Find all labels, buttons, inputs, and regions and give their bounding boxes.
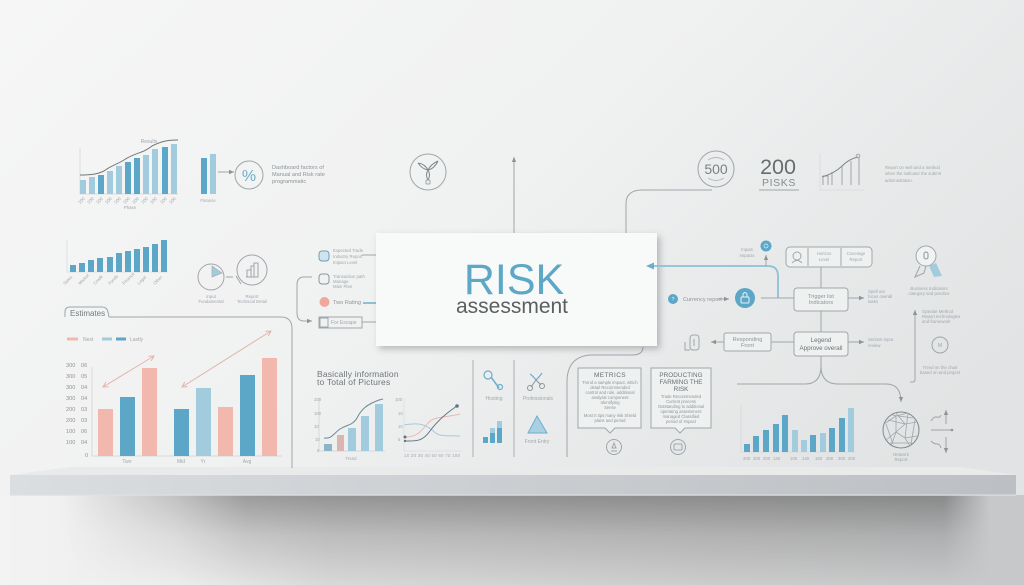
text block: right note [922, 309, 960, 324]
text block: medal caption [908, 286, 950, 296]
icon: directional arrows [931, 410, 953, 453]
chart: two bars with percent icon: Finance [200, 198, 216, 203]
arrow: up from card [513, 157, 515, 233]
icon: stacked bars [483, 421, 502, 443]
icon: key link: Hosting [486, 396, 503, 402]
icon: pie chart: Input [206, 294, 217, 299]
item 3: Two Rating [333, 300, 361, 306]
y axis labels: 06 [81, 363, 87, 369]
chart: top-left bars with trend line [77, 139, 178, 210]
chart: bottom-right bars: 160 [815, 456, 823, 461]
card: policy: plans and period [595, 418, 626, 423]
box: middle: Indicators [809, 300, 833, 306]
chart: second rising bars: Credit [92, 273, 104, 286]
y axis labels [66, 363, 88, 459]
heading: chart group: to Total of Pictures [317, 377, 390, 387]
side labels [868, 289, 894, 348]
stat: 200 risks: PISKS [762, 177, 796, 189]
card: predicting: Current process [666, 399, 696, 404]
text block: circle caption [920, 365, 961, 375]
card: predicting: Outstanding to additional [658, 404, 704, 409]
y axis labels: 05 [81, 374, 87, 380]
side labels: focus overall [868, 294, 892, 299]
arrow: blue into card [363, 302, 386, 304]
legend: Lastly [130, 337, 144, 343]
chart: second rising bars: Finance [121, 271, 136, 286]
x axis labels: 200 [131, 196, 140, 205]
tab heading: Estimates [70, 309, 105, 318]
y axis labels: 200 [66, 407, 75, 413]
icon: globe [883, 412, 919, 462]
card: predicting: FARMING THE [660, 379, 702, 386]
heading: chart group [317, 369, 399, 387]
chart: small multi-line: 10 [398, 424, 403, 429]
box: left: Responding [733, 337, 762, 343]
box: middle: Trigger list [808, 294, 834, 300]
node: impacts: Inputs [741, 247, 753, 252]
card: predicting: Trade Recommended [661, 394, 702, 399]
y axis labels: 03 [81, 418, 87, 424]
box: top triple [786, 247, 872, 267]
chart: small bars with line: 0 [317, 448, 320, 453]
chart: bottom-right bars: 200 [826, 456, 834, 461]
text block: top-right note: when the indicator the submit [885, 171, 942, 176]
heading: chart group: Basically information [317, 369, 399, 379]
chart: small multi-line: 100 [395, 397, 403, 402]
side labels: Spell out [868, 289, 886, 294]
card: policy: METRICS [594, 372, 626, 379]
text block: medal caption: category and practice [908, 291, 950, 296]
icon: bar gauge: Report [246, 294, 259, 299]
y axis labels: 04 [81, 440, 87, 446]
chart: small multi-line [395, 397, 462, 458]
text block: circle caption: based on and project [920, 370, 961, 375]
item 1 [319, 248, 364, 265]
icon: stack circle [606, 440, 622, 454]
box: top triple: Level [819, 257, 829, 262]
card: predicting: operating assessment [661, 409, 702, 414]
chart: mini line bars [820, 153, 864, 190]
dividers [473, 360, 514, 457]
stat: 200 risks: 200 [760, 155, 796, 179]
x axis labels: 200 [77, 196, 86, 205]
icon: screen circle [670, 440, 686, 454]
connector: card to policy cards [567, 347, 643, 457]
stat: 500 circle [698, 151, 734, 187]
x axis labels: 200 [140, 196, 149, 205]
text block: top-right note: Report on well and a method [885, 165, 941, 170]
side labels: tasks [868, 299, 878, 304]
bracket arrow [910, 310, 915, 382]
x axis labels [122, 459, 251, 465]
text block: medal caption: Business Indicators [910, 286, 948, 291]
chart: second rising bars: Other [152, 274, 164, 286]
icon: key link [484, 371, 503, 402]
stat: 500 circle: 500 [704, 161, 728, 177]
chart: small multi-line: 10 [398, 411, 403, 416]
node: currency report: ? [672, 297, 675, 303]
x axis labels: 200 [104, 196, 113, 205]
y axis labels: 300 [66, 385, 75, 391]
card: policy: Identifying [600, 400, 620, 405]
connector: flow lines [711, 267, 901, 402]
box: top triple: Report [850, 257, 863, 262]
chart: small bars with line: 100 [314, 411, 322, 416]
card: policy [578, 368, 641, 433]
chart: bottom-right bars: 200 [848, 456, 856, 461]
item 1: Industry Report [333, 254, 363, 259]
x axis labels: 200 [86, 196, 95, 205]
item 4: For Escape [331, 320, 357, 326]
legend [67, 337, 144, 343]
item 1: Expected Trade [333, 248, 364, 253]
side labels: Section Input [868, 337, 894, 342]
text block: top-left note [272, 165, 325, 185]
text block: circle caption: Trend on the chart [923, 365, 958, 370]
chart: small bars with line: 100 [314, 397, 322, 402]
icon: percent: % [242, 168, 256, 185]
icon: pie chart: Fundamental [198, 299, 224, 304]
connector: 500 circle to card [626, 190, 712, 233]
icon: documents [685, 335, 699, 350]
box: left [724, 333, 771, 351]
x axis labels: 200 [168, 196, 177, 205]
connector: left list to card [297, 255, 376, 322]
chart: two bars with percent icon [200, 154, 263, 203]
icon: bar gauge [226, 255, 267, 304]
list: left inputs [319, 248, 365, 328]
y axis labels: 300 [66, 374, 75, 380]
icon: lock [735, 288, 755, 308]
panel: chart with tab [65, 307, 292, 468]
chart: second rising bars: Legal [136, 275, 147, 286]
node: impacts: Impacts [739, 253, 755, 258]
chart: small bars with line [314, 397, 385, 461]
chart: bottom-right bars [741, 405, 857, 461]
chart: bottom-right bars: 200 [763, 456, 771, 461]
y axis labels: 300 [66, 396, 75, 402]
chart: second rising bars: Market [77, 272, 91, 286]
icon: triangle [525, 416, 550, 445]
chart: small multi-line: 10 20 30 40 50 60 70 100 [404, 453, 461, 458]
node: currency report [668, 294, 729, 304]
text block: top-right note: administration. [885, 178, 913, 183]
chart: top-left bars with trend line: Phase [124, 205, 137, 210]
card: policy: control and rule, additional [585, 390, 635, 395]
y axis labels: 200 [66, 418, 75, 424]
card: predicting: RISK [674, 386, 689, 393]
box: bottom: Approve overall [800, 345, 842, 352]
y axis labels: 100 [66, 440, 75, 446]
icon: bar gauge: Technical Detail [237, 299, 267, 304]
icon: pie chart [198, 264, 224, 304]
chart: second rising bars: Funds [107, 274, 119, 286]
box: top triple: Coverage [847, 251, 866, 256]
chart: small bars with line: Trend [345, 456, 357, 461]
x axis labels: Avg [243, 459, 251, 465]
chart: bottom-right bars: 200 [743, 456, 751, 461]
chart: bottom-right bars: 140 [773, 456, 781, 461]
icon: small circle: M [938, 343, 942, 349]
chart: small bars with line: 10 [315, 437, 320, 442]
card: predicting: managed Classified [663, 414, 700, 419]
x axis labels [77, 196, 177, 205]
node: currency report: Currency report [683, 297, 722, 303]
text block: top-left note: Dashboard factors of [272, 165, 324, 171]
x axis labels: 200 [113, 196, 122, 205]
y axis labels: 04 [81, 385, 87, 391]
text block: right note: Operate Method [922, 309, 954, 314]
trend arrows [103, 331, 271, 387]
card: predicting [651, 368, 711, 433]
card: predicting: PRODUCTING [659, 372, 703, 379]
box: bottom: Legend [811, 337, 832, 344]
x axis labels: Yr [200, 459, 206, 465]
legend: Next [83, 337, 94, 343]
item 2: Manage [333, 279, 349, 284]
title: RISK: RISK [464, 256, 564, 304]
icon: globe: Network [893, 452, 910, 457]
box: left: Front [741, 343, 754, 349]
icon: small circle [932, 337, 948, 353]
chart: bottom-right bars: 300 [838, 456, 846, 461]
y axis labels: 04 [81, 396, 87, 402]
x axis labels: Mid [177, 459, 185, 465]
x axis labels: 200 [159, 196, 168, 205]
x axis labels: 200 [122, 196, 131, 205]
item 2: Transaction path [333, 274, 365, 279]
y axis labels: 100 [66, 429, 75, 435]
chart: bottom-right bars: 200 [753, 456, 761, 461]
y axis labels: 300 [66, 363, 75, 369]
chart: bottom-right bars: 140 [802, 456, 810, 461]
icon: medal [915, 246, 942, 277]
x axis labels: Two [122, 459, 132, 465]
item 2: Main Plan [333, 284, 353, 289]
chart: second rising bars [62, 240, 168, 286]
box: bottom [794, 332, 848, 356]
icon: heart link: Professionals [523, 396, 554, 402]
item 1: Impact Level [333, 260, 357, 265]
text block: top-left note: programmatic [272, 179, 306, 185]
chart: bottom-right bars: 100 [790, 456, 798, 461]
box: middle [794, 288, 848, 311]
tab heading [65, 307, 109, 318]
y axis labels: 06 [81, 429, 87, 435]
card: policy: Trend a sample impact, which [582, 380, 638, 385]
chart: small multi-line: 6 [398, 437, 401, 442]
side labels: review [868, 343, 881, 348]
y axis labels: 03 [81, 407, 87, 413]
subtitle: assessment: assessment [456, 295, 568, 318]
item 2 [319, 274, 365, 289]
stat: 200 risks [759, 155, 799, 190]
x axis labels: 200 [95, 196, 104, 205]
chart: second rising bars: Sales [62, 275, 73, 286]
chart: small bars with line: 10 [314, 424, 319, 429]
x axis labels: 200 [149, 196, 158, 205]
bars [98, 358, 277, 456]
icon: triangle: Front Entry [525, 439, 550, 445]
text block: top-left note: Manual and Risk rate [272, 172, 325, 178]
arrow: blue to card [650, 266, 778, 298]
icon: heart link [523, 373, 554, 402]
card: predicting: period of Impact [666, 419, 697, 424]
card: policy: Sense [604, 405, 617, 410]
y axis labels: 0 [85, 453, 88, 459]
text block: top-right note [885, 165, 942, 183]
shelf [0, 467, 1024, 585]
text block: right note: and framework [922, 319, 951, 324]
label: Results [141, 139, 158, 145]
icon: globe: Report [895, 457, 908, 462]
card: policy: detail Recommended [590, 385, 630, 390]
main card [376, 233, 657, 346]
node: impacts [739, 240, 772, 266]
text block: right note: Report technologies [922, 314, 960, 319]
card: policy: analysis component [591, 395, 629, 400]
box: top triple: Horizon [817, 251, 832, 256]
card: policy: Most It tips many risk Shield [584, 413, 637, 418]
icon: leaves circle [410, 154, 446, 190]
